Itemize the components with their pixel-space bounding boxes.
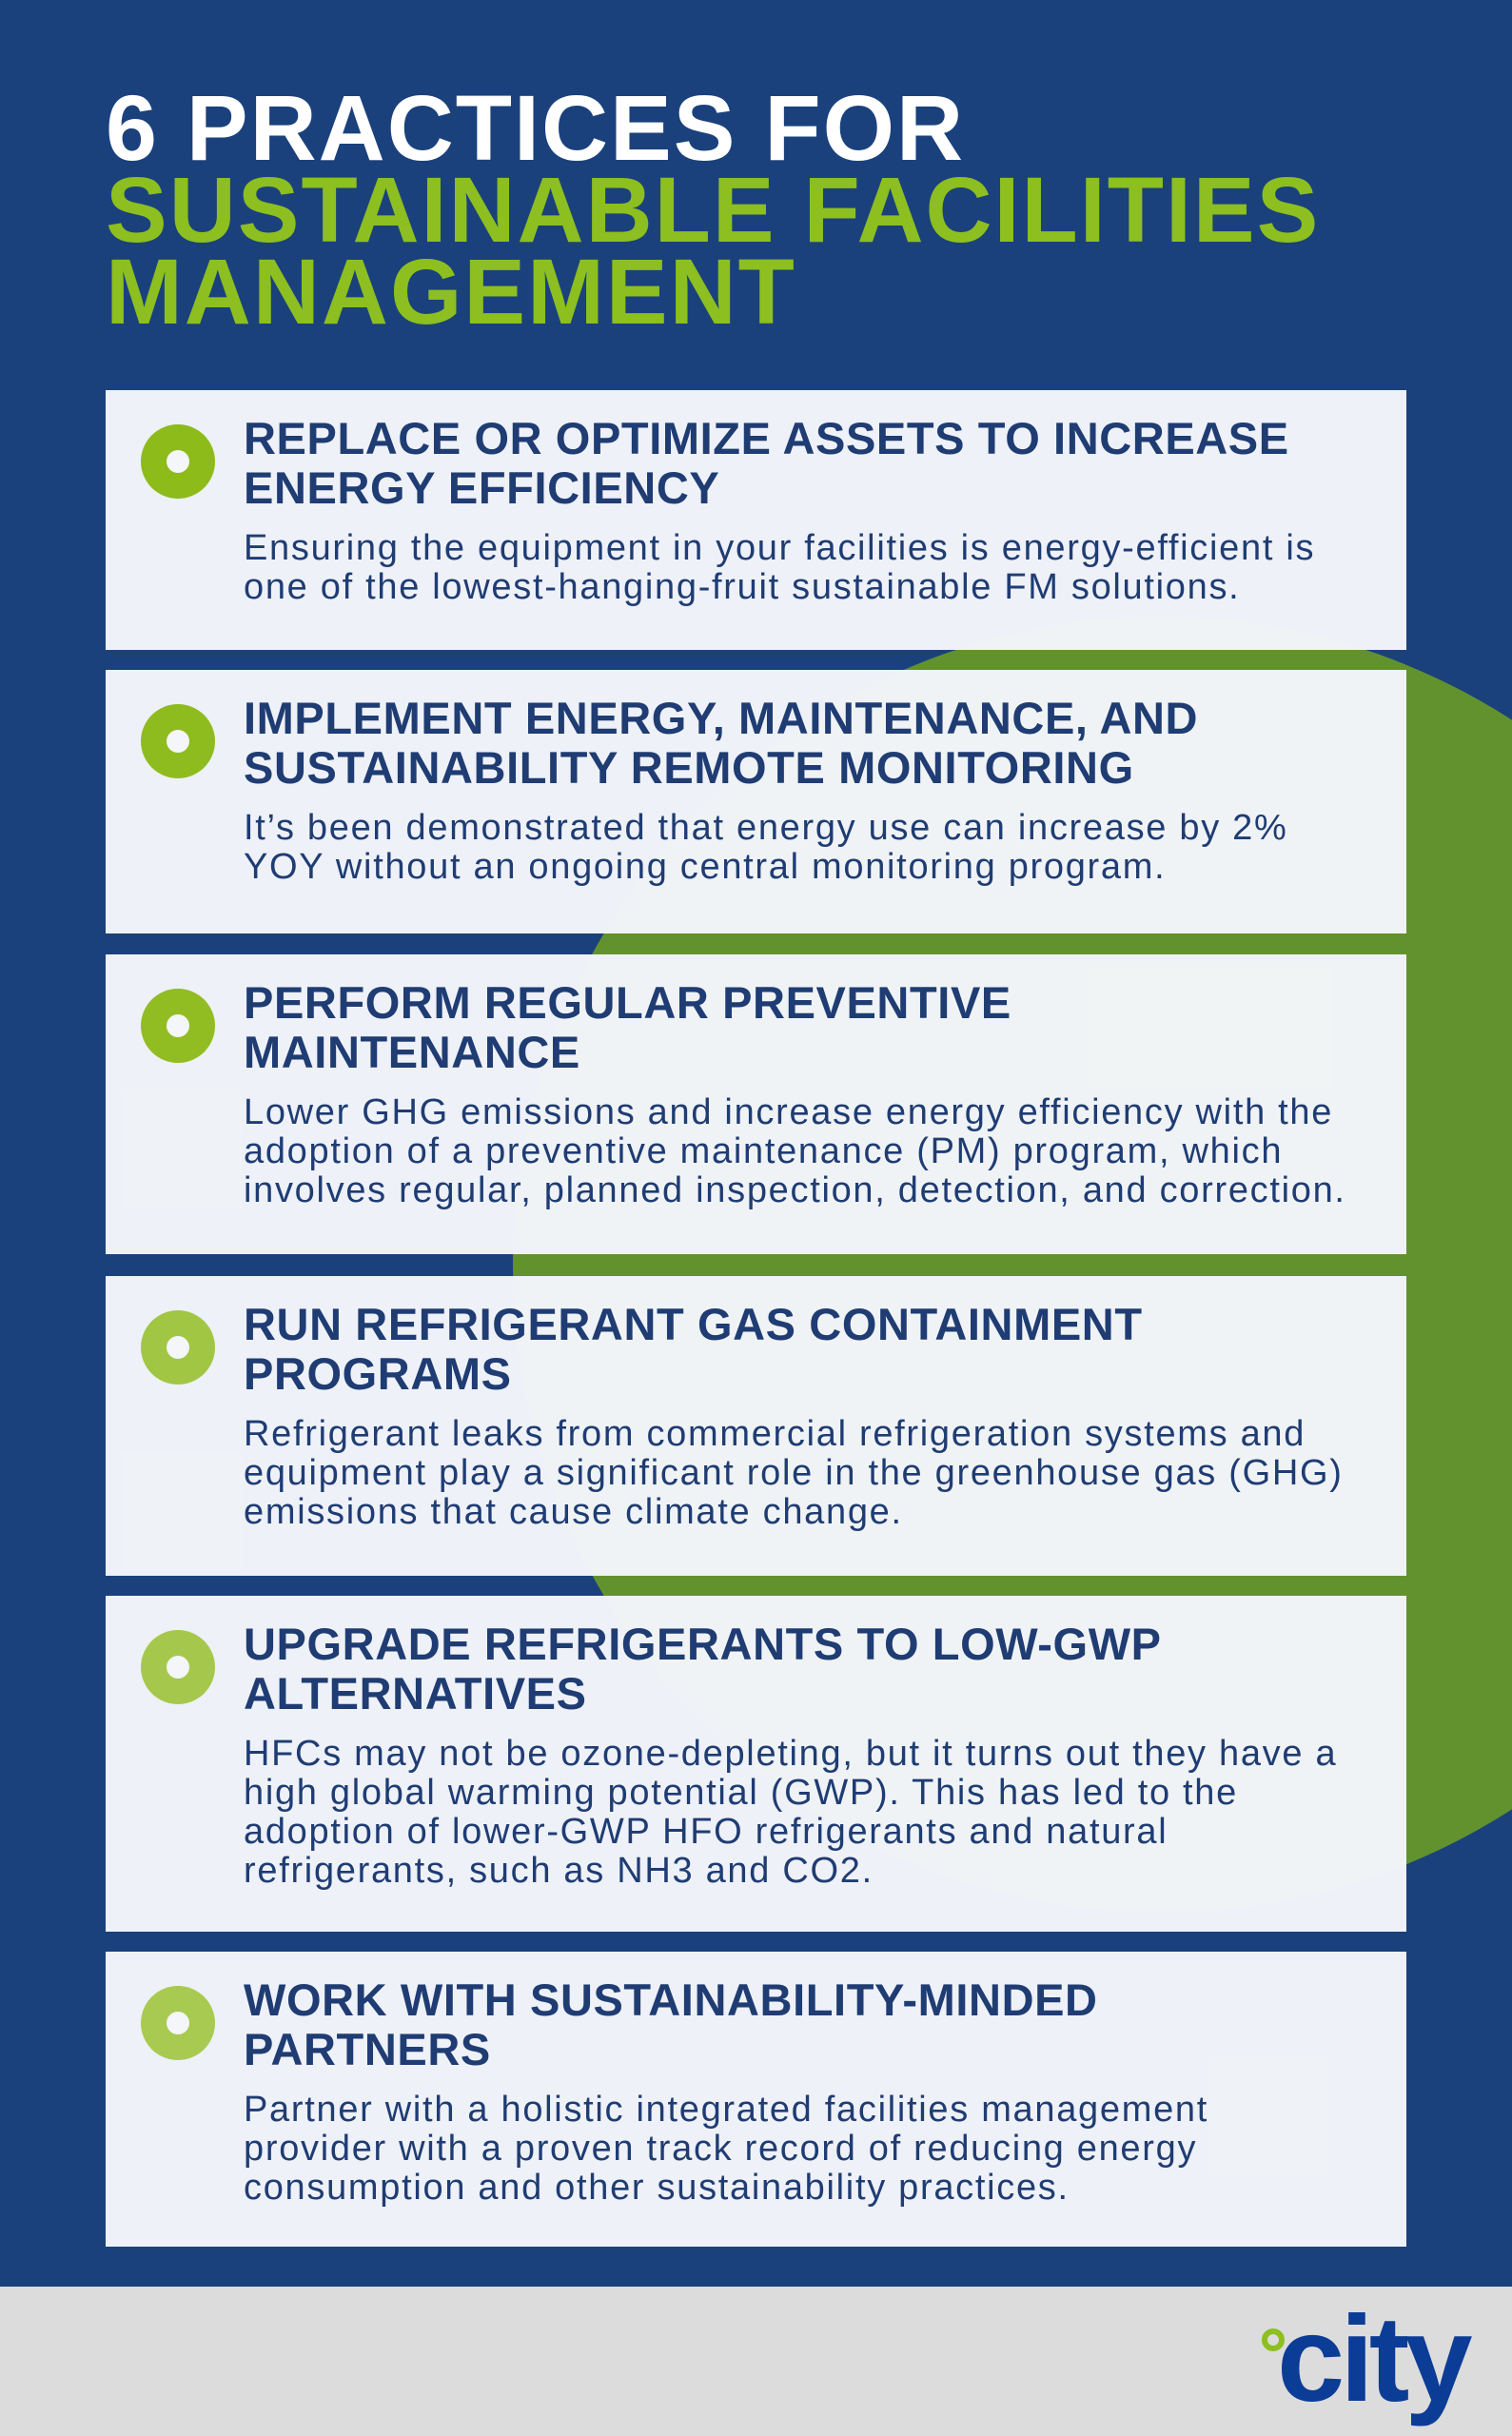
heading 1: REPLACE OR OPTIMIZE ASSETS TO INCREASE [244, 413, 1289, 463]
text 5: HFCs may not be ozone-depleting, but it turns out they have a [244, 1734, 1337, 1774]
heading 3 [244, 977, 1011, 1077]
text 3: adoption of a preventive maintenance (PM) program, which [244, 1131, 1283, 1171]
icon: ring 4 [141, 1310, 215, 1385]
heading 5: UPGRADE REFRIGERANTS TO LOW-GWP [244, 1619, 1162, 1669]
heading 3: PERFORM REGULAR PREVENTIVE [244, 977, 1011, 1028]
text 1: Ensuring the equipment in your facilities is energy-efficient is [244, 528, 1315, 568]
text 4: equipment play a significant role in the greenhouse gas (GHG) [244, 1453, 1344, 1493]
text 6: Partner with a holistic integrated facilities management [244, 2090, 1208, 2130]
heading 2: IMPLEMENT ENERGY, MAINTENANCE, AND [244, 693, 1198, 743]
text 6 [244, 2090, 1208, 2208]
text 2: YOY without an ongoing central monitoring program. [244, 847, 1166, 887]
text 1: one of the lowest-hanging-fruit sustainable FM solutions. [244, 567, 1240, 607]
text 4: emissions that cause climate change. [244, 1492, 903, 1532]
heading 3: MAINTENANCE [244, 1027, 580, 1077]
heading 6 [244, 1974, 1098, 2074]
logo: city [1262, 2291, 1472, 2427]
text 3: involves regular, planned inspection, detection, and correction. [244, 1170, 1346, 1210]
title: SUSTAINABLE FACILITIES [106, 158, 1320, 262]
panel: card 2 [106, 670, 1406, 933]
icon: logo ring [1262, 2328, 1285, 2351]
background green circle [513, 617, 1512, 1913]
text 4 [244, 1414, 1344, 1532]
text 3: Lower GHG emissions and increase energy efficiency with the [244, 1092, 1333, 1132]
icon: ring 5 [141, 1630, 215, 1704]
icon: ring 6 [141, 1986, 215, 2060]
heading 2 [244, 693, 1198, 793]
text 5: refrigerants, such as NH3 and CO2. [244, 1851, 874, 1891]
icon: ring 2 [141, 704, 215, 778]
text 5: high global warming potential (GWP). This has led to the [244, 1773, 1238, 1813]
panel: card 1 [106, 390, 1406, 650]
footer [0, 2287, 1512, 2436]
text 6: provider with a proven track record of reducing energy [244, 2129, 1197, 2169]
title: MANAGEMENT [106, 240, 796, 344]
heading 2: SUSTAINABILITY REMOTE MONITORING [244, 742, 1134, 793]
panel: card 4 [106, 1276, 1406, 1576]
panel: card 6 [106, 1952, 1406, 2247]
panel: card 5 [106, 1596, 1406, 1932]
title: 6 PRACTICES FOR [106, 76, 965, 180]
heading 4: RUN REFRIGERANT GAS CONTAINMENT [244, 1299, 1143, 1349]
text 6: consumption and other sustainability practices. [244, 2168, 1070, 2208]
text 2 [244, 808, 1287, 887]
text 1 [244, 528, 1315, 607]
title [106, 76, 1320, 344]
heading 4: PROGRAMS [244, 1348, 512, 1399]
text 5: adoption of lower-GWP HFO refrigerants and natural [244, 1812, 1168, 1852]
text 2: It’s been demonstrated that energy use can increase by 2% [244, 808, 1287, 848]
heading 5 [244, 1619, 1162, 1719]
heading 5: ALTERNATIVES [244, 1668, 587, 1719]
text 4: Refrigerant leaks from commercial refrigeration systems and [244, 1414, 1306, 1454]
icon: ring 1 [141, 424, 215, 499]
heading 1 [244, 413, 1289, 513]
icon: ring 3 [141, 989, 215, 1063]
logo text: city [1277, 2291, 1468, 2427]
text 3 [244, 1092, 1346, 1210]
heading 6: PARTNERS [244, 2024, 491, 2074]
heading 6: WORK WITH SUSTAINABILITY-MINDED [244, 1974, 1098, 2025]
panel: card 3 [106, 954, 1406, 1254]
text 5 [244, 1734, 1337, 1891]
heading 4 [244, 1299, 1143, 1399]
heading 1: ENERGY EFFICIENCY [244, 462, 719, 513]
